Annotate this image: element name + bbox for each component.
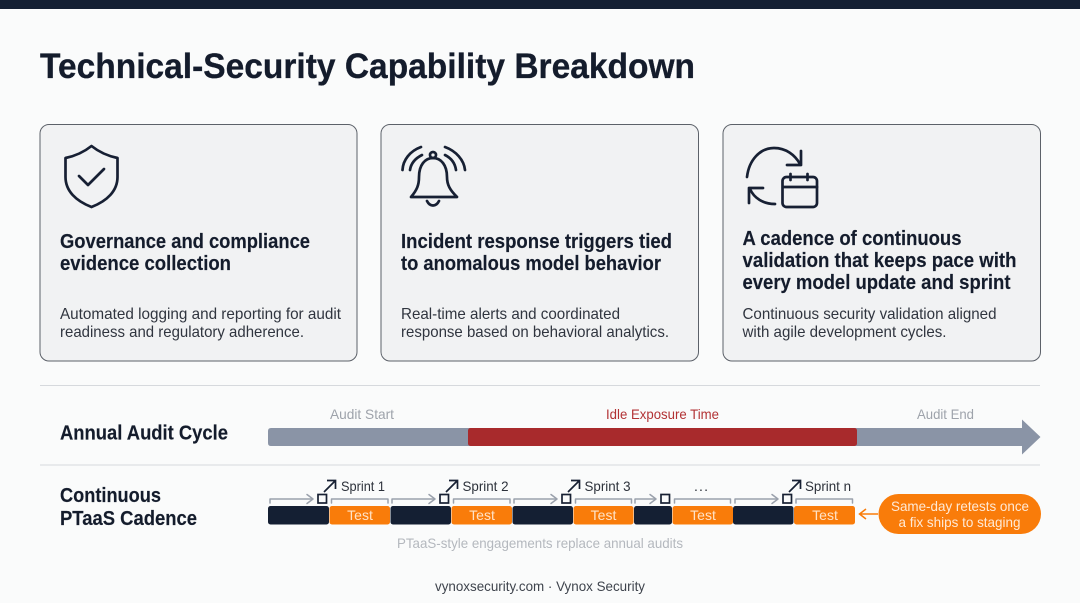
top bar	[0, 0, 1080, 9]
sprint milestones	[318, 494, 792, 503]
description: Continuous security validation aligned	[742, 306, 996, 323]
continuous ptaas cadence label: Continuous	[60, 485, 161, 507]
sprint labels: Sprint n	[805, 478, 851, 494]
panel: incident response	[381, 124, 698, 361]
sprint labels: Sprint 3	[584, 478, 631, 494]
idle exposure bar	[468, 428, 857, 446]
sprint labels: Sprint 2	[462, 478, 509, 494]
continuous ptaas cadence label	[60, 485, 197, 530]
description: readiness and regulatory adherence.	[60, 324, 304, 341]
heading: validation that keeps pace with	[742, 250, 1016, 272]
description: with agile development cycles.	[742, 324, 946, 341]
heading: A cadence of continuous	[742, 228, 962, 250]
description: Automated logging and reporting for audit	[60, 306, 342, 323]
heading	[60, 231, 310, 275]
arrows over development segments	[270, 494, 778, 504]
icon: ringing bell	[402, 147, 465, 206]
heading: to anomalous model behavior	[401, 253, 661, 275]
callout: same-day retests	[860, 494, 1041, 534]
diagonal sprint arrows	[324, 480, 800, 492]
ptaas sprint timeline	[268, 478, 855, 524]
panel: continuous validation	[723, 124, 1040, 361]
test labels: Test	[690, 507, 716, 523]
sprint labels: ...	[694, 478, 708, 494]
heading: Governance and compliance	[60, 231, 310, 253]
sprint labels: Sprint 1	[341, 478, 385, 494]
description: response based on behavioral analytics.	[401, 324, 669, 341]
footer: vynoxsecurity.com · Vynox Security	[435, 578, 645, 594]
icon: cycle arrows with calendar	[747, 148, 817, 207]
panel: governance and compliance	[40, 124, 357, 361]
test labels	[347, 507, 838, 523]
heading	[742, 228, 1016, 294]
icon: shield with check	[66, 146, 118, 207]
callout arrow	[860, 509, 878, 519]
development segments	[268, 506, 794, 524]
description: Real-time alerts and coordinated	[401, 306, 620, 323]
description	[401, 306, 669, 341]
callout: same-day retests: Same-day retests once	[891, 498, 1029, 514]
description	[60, 306, 342, 341]
brackets over test segments	[332, 499, 852, 503]
test segments	[330, 506, 855, 524]
test labels: Test	[591, 507, 616, 523]
timeline caption: PTaaS-style engagements replace annual audits	[397, 535, 683, 551]
description	[742, 306, 996, 341]
heading: every model update and sprint	[742, 272, 1011, 294]
heading	[401, 231, 672, 275]
continuous ptaas cadence label: PTaaS Cadence	[60, 508, 197, 530]
callout: same-day retests: a fix ships to staging	[898, 514, 1020, 530]
heading: evidence collection	[60, 253, 231, 275]
heading: Incident response triggers tied	[401, 231, 672, 253]
sprint labels	[341, 478, 851, 494]
test labels: Test	[469, 507, 495, 523]
annual audit cycle label: Annual Audit Cycle	[60, 422, 228, 444]
idle exposure label: Idle Exposure Time	[606, 406, 719, 422]
annual audit timeline	[268, 406, 1040, 454]
audit start label: Audit Start	[330, 406, 394, 422]
audit end label: Audit End	[917, 406, 974, 422]
test labels: Test	[347, 507, 373, 523]
timeline arrow	[268, 420, 1040, 454]
test labels: Test	[812, 507, 838, 523]
title: Technical-Security Capability Breakdown	[40, 47, 695, 86]
